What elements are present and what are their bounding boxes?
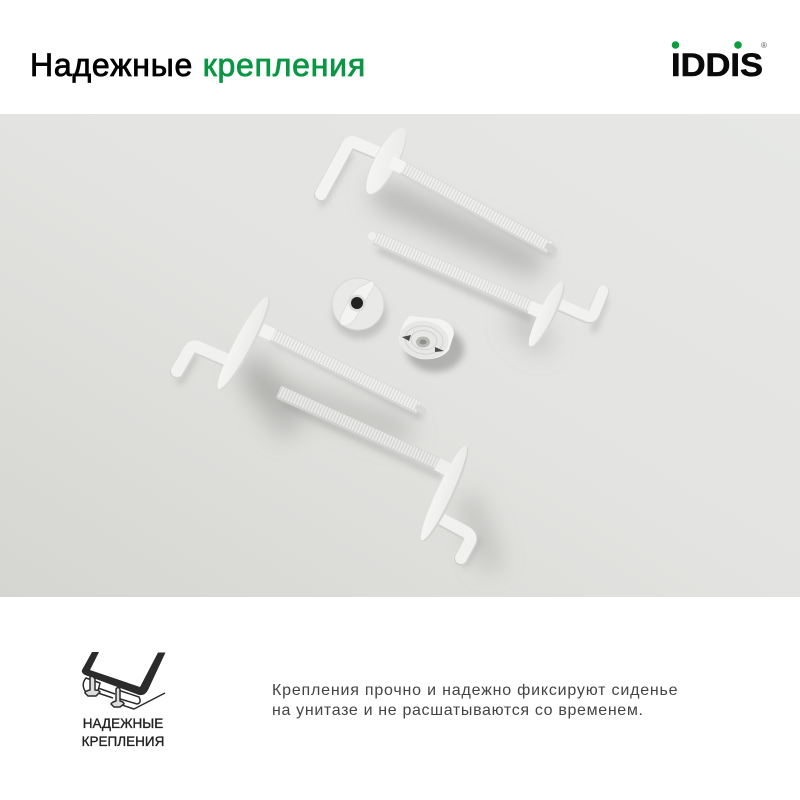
icon label (82, 716, 164, 749)
product photo: toilet seat fasteners (0, 114, 800, 597)
description text: Крепления прочно и надежно фиксируют сиденье (272, 682, 678, 699)
hinge barrels and pins (83, 676, 165, 709)
wing nut (332, 278, 384, 330)
bolt 2 (right) (368, 232, 603, 351)
bolt 1 (top) (321, 123, 553, 250)
icon label: КРЕПЛЕНИЯ (82, 734, 164, 749)
soft shadows (180, 155, 605, 564)
title: Надежные крепления (30, 47, 366, 83)
description text (272, 682, 678, 719)
seat outline (82, 652, 166, 695)
bolt 4 (bottom) (279, 391, 475, 559)
logo: IDDIS: ® (761, 41, 767, 50)
round threaded nut (397, 316, 454, 362)
description text: на унитазе и не расшатываются со временем. (272, 702, 644, 719)
bolt 3 (left) (177, 293, 423, 411)
icon: seat hinge fastening (82, 652, 166, 710)
logo: IDDIS: IDDIS (671, 47, 763, 83)
icon label: НАДЕЖНЫЕ (83, 716, 163, 731)
